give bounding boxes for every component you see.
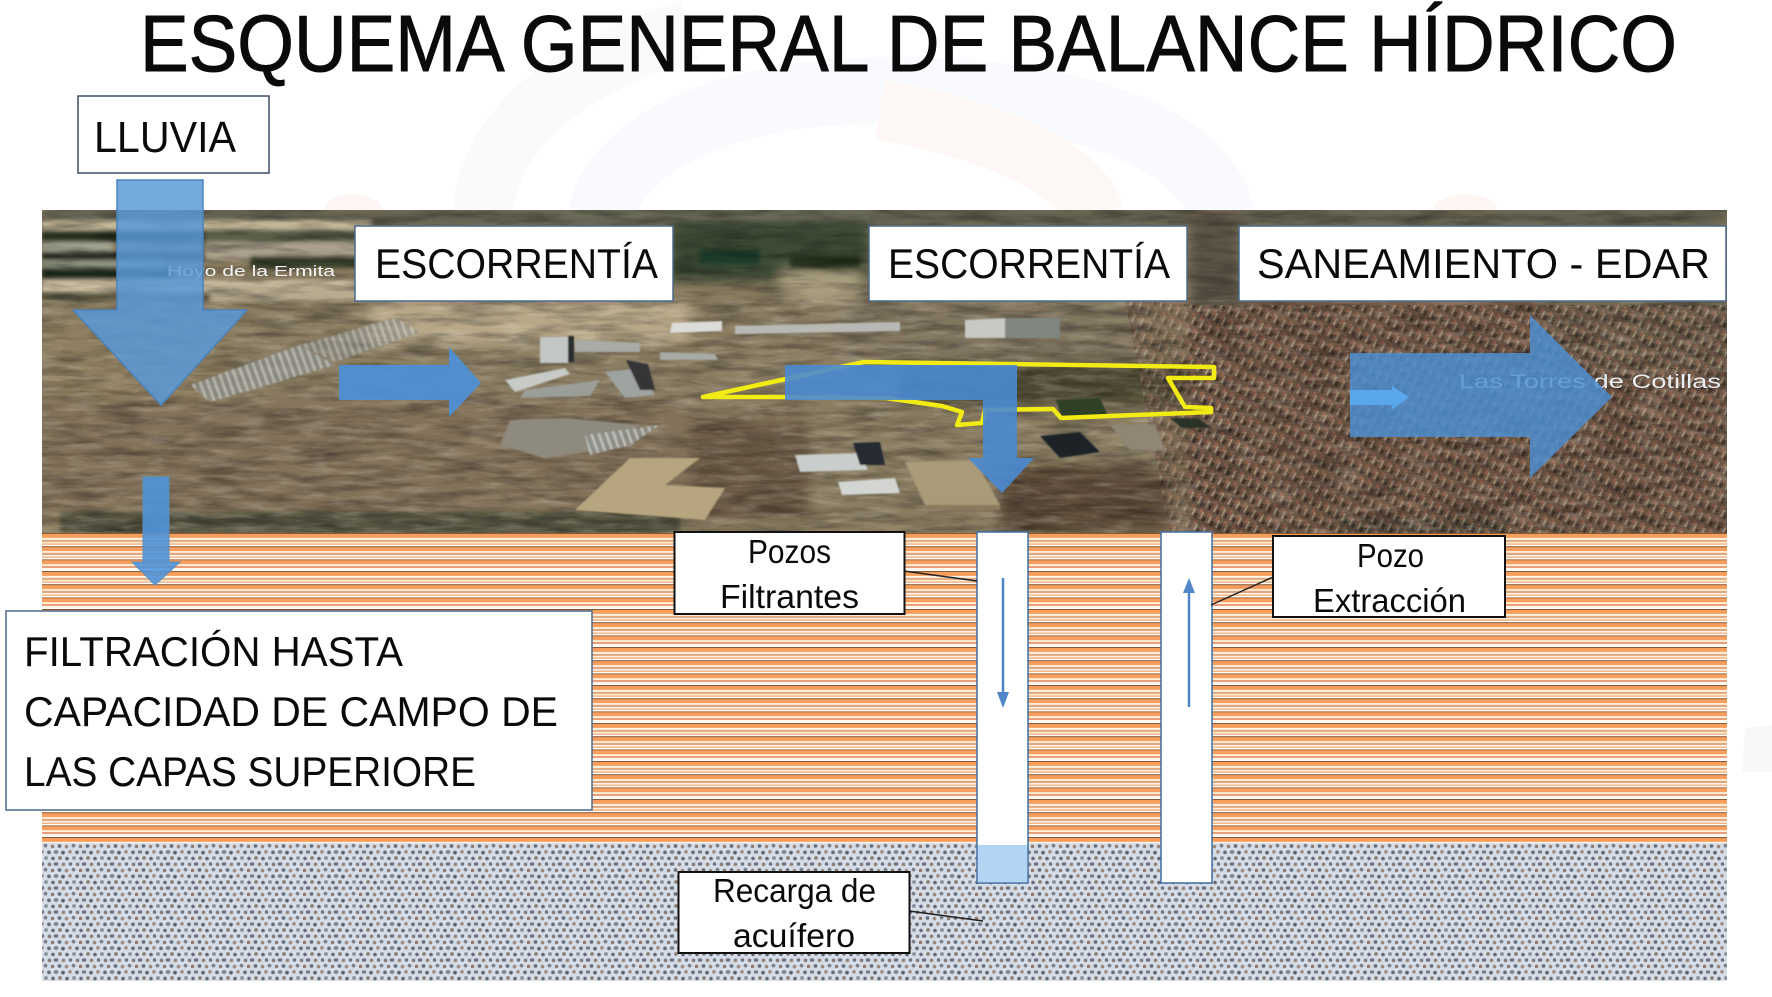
top-left field bands (42, 210, 1510, 533)
label: escorrentía 1: ESCORRENTÍA (375, 240, 658, 287)
label: pozos filtrantes: Filtrantes (720, 578, 859, 615)
label: lluvia (78, 96, 269, 173)
yellow plot outline (703, 362, 1214, 425)
label: recarga de acuífero (678, 872, 910, 954)
arrow: small sanitation flow (1350, 386, 1409, 410)
place label: Hoyo de la Ermita: Hoyo de la Ermita (167, 263, 336, 280)
label: filtración hasta capacidad de campo: LAS CAPAS SUPERIORE (24, 748, 476, 795)
aquifer gravel layer (42, 843, 1727, 981)
label: pozos filtrantes: Pozos (748, 533, 831, 570)
arrow: runoff left (339, 347, 481, 417)
label: lluvia: LLUVIA (94, 113, 237, 162)
leader lines (904, 571, 1273, 921)
label: pozo extracción (1273, 536, 1505, 619)
arrow: filtration downward (132, 477, 180, 585)
orange soil strata layer (42, 533, 1727, 843)
label: filtración hasta capacidad de campo: FILTRACIÓN HASTA (24, 628, 403, 675)
label: filtración hasta capacidad de campo (6, 611, 592, 810)
arrow: rain falling into ground (73, 180, 247, 405)
arrow: runoff bent to wells (785, 365, 1034, 493)
place label: Las Torres de Cotillas: Las Torres de Cotillas (1459, 372, 1721, 393)
well: pozo extracción (1161, 532, 1212, 883)
terrain grain (42, 210, 1727, 533)
label: escorrentía 2 (869, 226, 1187, 301)
label: escorrentía 1 (355, 226, 673, 301)
faint background logo watermark (323, 30, 1772, 772)
label: saneamiento - edar: SANEAMIENTO - EDAR (1257, 240, 1710, 287)
well: pozos filtrantes (977, 532, 1028, 883)
label: pozos filtrantes (674, 532, 904, 615)
arrow: large sanitation flow (1350, 315, 1612, 478)
label: pozo extracción: Pozo (1357, 537, 1424, 574)
city street texture (1125, 300, 1730, 533)
label: recarga de acuífero: Recarga de (713, 872, 876, 909)
label: saneamiento - edar (1239, 226, 1726, 301)
greenhouses and fields (190, 318, 1212, 520)
label: pozo extracción: Extracción (1313, 582, 1466, 619)
satellite aerial photo (42, 210, 1730, 533)
label: filtración hasta capacidad de campo: CAPACIDAD DE CAMPO DE (24, 688, 558, 735)
label: escorrentía 2: ESCORRENTÍA (888, 240, 1170, 287)
label: recarga de acuífero: acuífero (733, 917, 855, 954)
